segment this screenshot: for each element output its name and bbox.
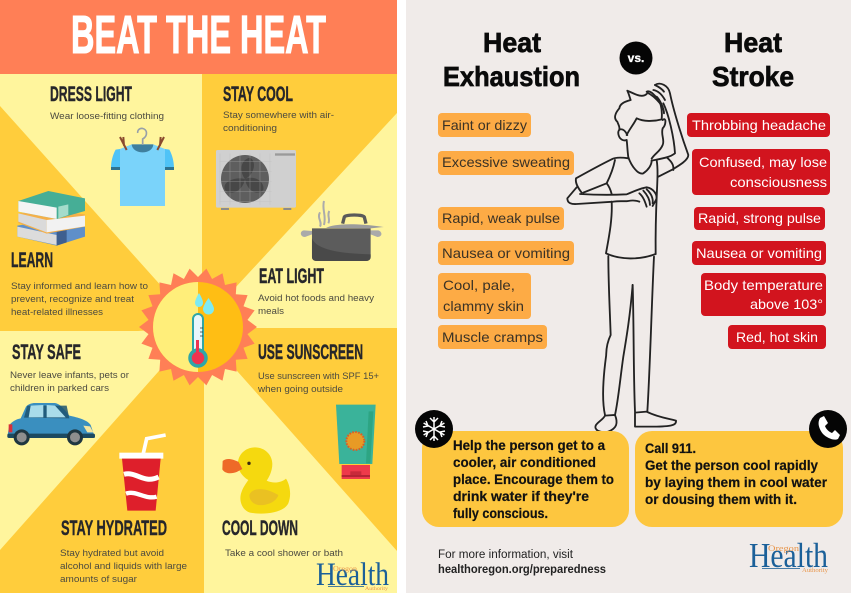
heading: heat stroke: Heat [724, 27, 782, 58]
symptom: faint or dizzy: Faint or dizzy [442, 117, 527, 133]
exhaustion symptoms [438, 113, 574, 349]
tip: dress light: Wear loose-fitting clothing [50, 111, 164, 122]
symptom: confused: consciousness [730, 174, 827, 190]
sun disc [153, 282, 243, 372]
tip: stay hydrated: Stay hydrated but avoid [60, 548, 164, 559]
heading: heat stroke [712, 27, 794, 92]
sun with thermometer [139, 269, 257, 385]
tip: eat light: Avoid hot foods and heavy [258, 293, 374, 304]
thermometer [190, 314, 206, 366]
vs badge: vs. [628, 51, 644, 65]
title banner [0, 0, 397, 74]
tip: stay cool: conditioning [223, 123, 277, 134]
tip: eat light: meals [258, 306, 284, 317]
tip: learn: heat-related illnesses [11, 307, 103, 318]
vs badge [620, 42, 652, 74]
symptom: faint or dizzy [438, 113, 531, 137]
callout: heat stroke first aid: by laying them in cool water [645, 475, 828, 490]
callout: heat exhaustion first aid: Help the person get to a [453, 438, 605, 453]
icon: blue car [7, 403, 95, 445]
symptom: nausea or vomiting: Nausea or vomiting [696, 245, 822, 261]
symptom: body temperature: above 103° [750, 296, 823, 312]
icon: air conditioner [216, 150, 296, 210]
symptom: nausea or vomiting [692, 241, 826, 265]
tip: stay safe [10, 341, 130, 394]
symptom: red hot skin: Red, hot skin [736, 329, 818, 345]
tip: use sunscreen [257, 341, 379, 395]
tip: dress light [50, 83, 164, 122]
logo: oregon health authority: Oregon [333, 564, 357, 573]
tip: cool down: COOL DOWN [222, 517, 298, 540]
tip: stay cool [223, 83, 334, 134]
tip: learn: prevent, recognize and treat [11, 294, 134, 305]
sun rays [139, 269, 257, 385]
tip: stay cool: STAY COOL [223, 83, 293, 106]
panel: beat the heat [0, 0, 397, 593]
logo: oregon health authority: Health [749, 536, 828, 575]
symptom: confused: Confused, may lose [699, 154, 827, 170]
symptom: confused [692, 149, 830, 195]
symptom: nausea or vomiting [438, 241, 574, 265]
symptom: red hot skin [728, 325, 826, 349]
symptom: excessive sweating: Excessive sweating [442, 154, 570, 170]
logo: oregon health authority: Authority [365, 586, 388, 592]
symptom: rapid strong pulse: Rapid, strong pulse [698, 210, 821, 226]
background wedges [0, 74, 397, 593]
tip: stay safe: STAY SAFE [12, 341, 81, 364]
symptom: nausea or vomiting: Nausea or vomiting [442, 245, 570, 261]
logo: oregon health authority: Health [316, 557, 389, 593]
title banner: BEAT THE HEAT [71, 5, 326, 65]
symptom: rapid weak pulse: Rapid, weak pulse [442, 210, 560, 226]
symptom: rapid weak pulse [438, 207, 564, 230]
symptom: muscle cramps: Muscle cramps [442, 329, 543, 345]
symptom: cool pale clammy skin: Cool, pale, [443, 277, 515, 293]
logo: oregon health authority: Oregon [768, 544, 799, 553]
panel background [406, 0, 851, 593]
tip: stay hydrated: amounts of sugar [60, 574, 138, 585]
callout: heat stroke first aid: or dousing them with it. [645, 492, 797, 507]
icon: steaming pot [301, 201, 384, 261]
tip: learn: LEARN [11, 249, 53, 272]
callout: heat exhaustion first aid: drink water if they're [453, 489, 590, 504]
callout: heat stroke first aid [635, 431, 843, 527]
icon: t-shirt on hanger [111, 128, 174, 206]
tip: use sunscreen: Use sunscreen with SPF 15+ [258, 371, 379, 382]
icon: stack of books [17, 191, 85, 246]
logo: oregon health authority: Authority [802, 568, 828, 574]
water drops [195, 293, 214, 314]
icon: snowflake [415, 410, 453, 448]
tip: stay hydrated: STAY HYDRATED [61, 517, 167, 540]
tip: use sunscreen: when going outside [257, 384, 343, 395]
heading: heat exhaustion [443, 27, 580, 92]
tip: stay hydrated [60, 517, 187, 585]
heading: heat exhaustion: Exhaustion [443, 61, 580, 92]
heading: heat stroke: Stroke [712, 61, 794, 92]
icon: red cup with straw [119, 435, 166, 511]
symptom: cool pale clammy skin [438, 273, 531, 319]
symptom: body temperature: Body temperature [704, 277, 823, 293]
heading: heat exhaustion: Heat [483, 27, 541, 58]
callout: heat exhaustion first aid: cooler, air conditioned [453, 455, 596, 470]
tip: eat light [258, 265, 374, 317]
callout: heat stroke first aid: Call 911. [645, 441, 696, 456]
tip: stay safe: children in parked cars [10, 383, 109, 394]
footer: more information: healthoregon.org/preparedness [438, 564, 606, 576]
tip: stay safe: Never leave infants, pets or [10, 370, 130, 381]
symptom: throbbing headache [687, 113, 830, 137]
tip: learn: Stay informed and learn how to [11, 281, 148, 292]
panel: heat exhaustion vs heat stroke [406, 0, 851, 593]
symptom: muscle cramps [438, 325, 547, 349]
tip: stay hydrated: alcohol and liquids with large [60, 561, 187, 572]
icon: sunscreen tube [336, 405, 376, 479]
tip: cool down [222, 517, 343, 559]
tip: learn [11, 249, 148, 318]
symptom: excessive sweating [438, 151, 574, 175]
tip: dress light: DRESS LIGHT [50, 83, 132, 106]
stroke symptoms [687, 113, 830, 349]
tip: eat light: EAT LIGHT [259, 265, 324, 288]
callout: heat stroke first aid: Get the person cool rapidly [645, 458, 818, 473]
icon: rubber duck [222, 447, 290, 514]
symptom: body temperature [701, 273, 826, 316]
symptom: rapid strong pulse [694, 207, 825, 230]
icon: phone [809, 410, 847, 448]
tip: use sunscreen: USE SUNSCREEN [258, 341, 363, 364]
callout: heat exhaustion first aid: place. Encourage them to [453, 472, 614, 487]
tip: cool down: Take a cool shower or bath [225, 548, 343, 559]
symptom: throbbing headache: Throbbing headache [692, 117, 826, 133]
footer: more information: For more information, visit [438, 549, 574, 561]
symptom: cool pale clammy skin: clammy skin [443, 298, 524, 314]
tip: stay cool: Stay somewhere with air- [223, 110, 334, 121]
callout: heat exhaustion first aid: fully conscious. [453, 506, 548, 521]
callout: heat exhaustion first aid [422, 431, 629, 527]
figure: person scratching head [567, 84, 688, 432]
footer: more information [438, 549, 606, 576]
